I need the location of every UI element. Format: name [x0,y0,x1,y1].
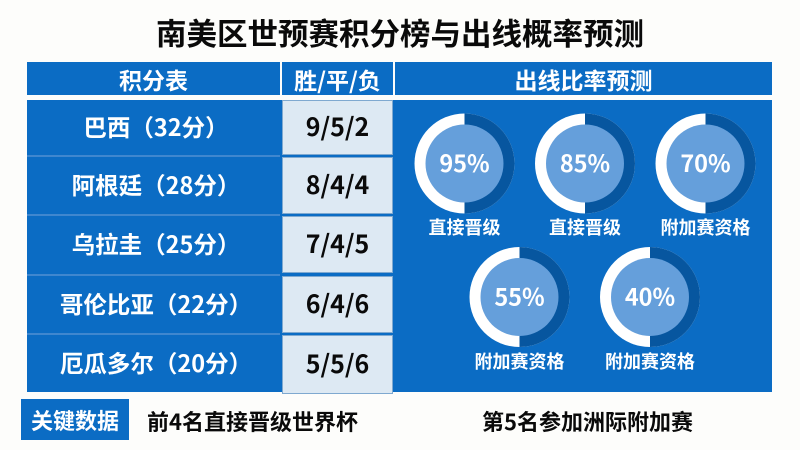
record: Brazil [282,100,393,155]
record: Uruguay: 7/4/5 [306,225,369,261]
panel: standings table [27,100,395,392]
header: standings: 积分表 [119,62,188,96]
title: 南美区世预赛积分榜与出线概率预测 [156,10,644,54]
team row: Brazil [27,100,280,155]
donut: 95% direct qualification: 直接晋级 [428,214,500,240]
donut: 55% playoff: 55% [494,278,545,312]
record: Ecuador: 5/5/6 [306,345,369,381]
header: standings [27,62,280,95]
record: Brazil: 9/5/2 [306,108,369,144]
team row: Argentina [27,157,280,214]
record: Uruguay [282,216,393,273]
team row: Uruguay [27,216,280,273]
donut: 40% playoff [600,247,700,374]
donut: 70% playoff: 70% [680,145,731,179]
donut: 95% direct qualification [414,114,514,240]
donut: 55% playoff [470,247,570,374]
donut: 40% playoff: 40% [625,278,675,312]
donut: 55% playoff: 附加赛资格 [474,348,564,374]
key data badge: 关键数据 [31,404,119,436]
team row: Colombia: 哥伦比亚（22分） [60,286,252,320]
header: win draw loss: 胜/平/负 [294,62,381,96]
record: Ecuador [282,335,393,394]
record: Argentina [282,157,393,214]
donut: 70% playoff: 附加赛资格 [660,214,750,240]
panel: qualification probability [395,100,772,392]
donut: 85% direct qualification [535,114,635,240]
record: Colombia [282,276,393,333]
team row: Ecuador [27,335,280,392]
donut: 70% playoff [656,114,756,240]
key fact: top four: 前4名直接晋级世界杯 [147,404,358,436]
record: Colombia: 6/4/6 [306,285,369,321]
record: Argentina: 8/4/4 [306,166,369,202]
donut: 95% direct qualification: 95% [439,145,490,179]
team row: Argentina: 阿根廷（28分） [72,167,240,201]
donut: 85% direct qualification: 直接晋级 [549,214,621,240]
header: qualification probability: 出线比率预测 [514,62,652,96]
key data badge [21,399,129,440]
header: qualification probability [395,62,772,95]
team row: Brazil: 巴西（32分） [83,109,229,143]
donut: 40% playoff: 附加赛资格 [605,348,695,374]
team row: Colombia [27,276,280,333]
team row: Ecuador: 厄瓜多尔（20分） [60,345,252,379]
key fact: fifth place: 第5名参加洲际附加赛 [482,404,693,436]
donut: 85% direct qualification: 85% [560,145,610,179]
team row: Uruguay: 乌拉圭（25分） [72,226,240,260]
